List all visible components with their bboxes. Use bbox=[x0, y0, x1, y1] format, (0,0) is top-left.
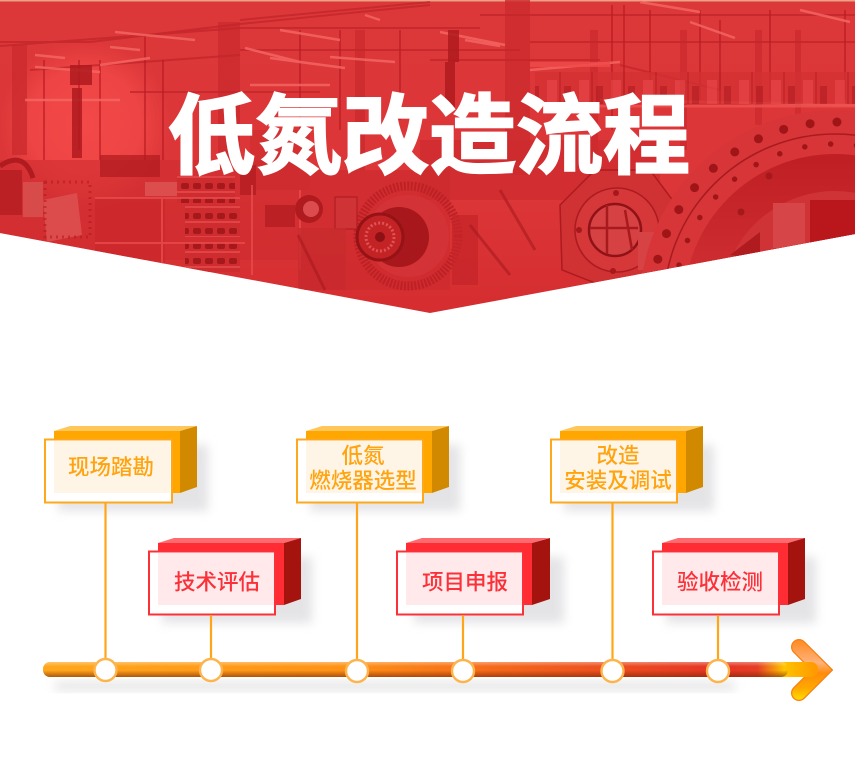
step label: 燃烧器选型 bbox=[309, 469, 417, 493]
gear machine bbox=[295, 186, 535, 290]
factory ceiling beams and columns bbox=[0, 0, 855, 180]
round flange machine bbox=[560, 170, 680, 285]
timeline shadow bbox=[55, 682, 735, 690]
step 3: 低氮燃烧器选型 bbox=[297, 426, 460, 511]
large ring flange bbox=[643, 118, 855, 274]
step 5: 改造安装及调试 bbox=[551, 426, 714, 511]
timeline nodes bbox=[94, 659, 729, 682]
step label: 项目申报 bbox=[422, 570, 508, 594]
step label: 验收检测 bbox=[677, 570, 763, 594]
step label: 安装及调试 bbox=[564, 469, 672, 493]
step label: 技术评估 bbox=[174, 570, 260, 594]
step label: 改造 bbox=[596, 444, 640, 468]
step 1: 现场踏勘 bbox=[45, 426, 208, 511]
header banner: red factory photo bbox=[0, 0, 855, 313]
timeline bar bbox=[43, 662, 818, 677]
step 2: 技术评估 bbox=[149, 538, 312, 623]
step label: 低氮 bbox=[341, 444, 385, 468]
shelves with parts bbox=[0, 155, 300, 275]
step 6: 验收检测 bbox=[653, 538, 816, 623]
step 4: 项目申报 bbox=[397, 538, 564, 623]
connector stems bbox=[106, 503, 718, 662]
arrow head bbox=[799, 647, 822, 693]
title: 低氮改造流程 bbox=[168, 88, 690, 186]
step label: 现场踏勘 bbox=[68, 456, 154, 480]
mid-ground machinery block bbox=[0, 130, 660, 290]
